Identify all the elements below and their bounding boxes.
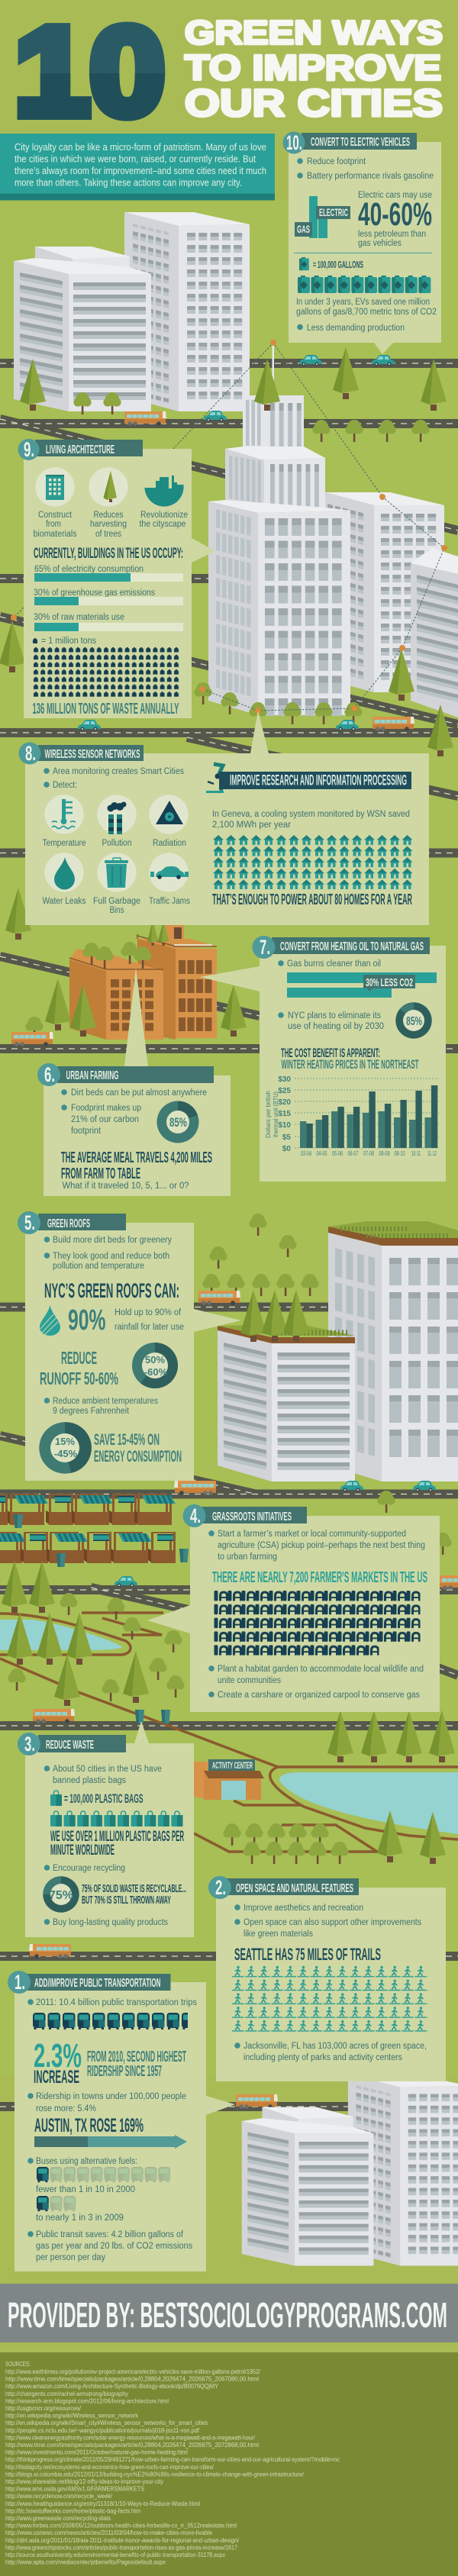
header 9: 9. [24, 438, 34, 461]
sources: http://www.amazon.com/Living-Architecture-Synthetic-Biology-ebook/dp/B0076QQjMY [5, 2383, 219, 2390]
bullet Jacksonville [234, 2042, 427, 2062]
bar chart: heating prices: $5 [282, 1133, 291, 1142]
bullet gas: Gas burns cleaner than oil [287, 959, 381, 969]
bullet alt fuels: Buses using alternative fuels: [36, 2157, 137, 2166]
sources: http://www.healthguidance.org/entry/11318/1/10-Ways-to-Reduce-Waste.html [5, 2500, 200, 2507]
central skyscraper [208, 345, 458, 717]
header 7 [252, 936, 430, 959]
donut 75%: 75% [49, 1889, 73, 1902]
icon: temperature [43, 795, 85, 848]
bullet ridership: rose more: 5.4% [36, 2104, 96, 2113]
market stalls [0, 1494, 189, 1723]
gallons pictogram [298, 257, 431, 293]
sources: http://dirt.asla.org/2011/01/18/aia-2011-institute-honor-awards-for-regional-and-urban-design/ [5, 2537, 240, 2544]
waste pictogram: = 1 million tons [41, 637, 96, 646]
bar chart: heating prices: 09-10 [394, 1150, 405, 1157]
panel 6: urban farming: THE AVERAGE MEAL TRAVELS 4,200 MILES [61, 1149, 212, 1166]
CO2 comparison bars [287, 972, 437, 998]
runoff stat: 50% [145, 1354, 165, 1365]
stat 40-60%: Electric cars may use [358, 191, 432, 200]
captions: harvesting [90, 520, 127, 529]
bullets: unite communities [218, 1676, 281, 1685]
bullet: banned plastic bags [53, 1776, 126, 1785]
bar chart: heating prices: 04-05 [316, 1150, 327, 1157]
panel 7: heating oil to natural gas [200, 936, 446, 1182]
donut 85% [157, 1101, 198, 1143]
footer: provided by band [0, 2284, 458, 2342]
NYC bullet: use of heating oil by 2030 [288, 1022, 384, 1031]
donut 75% [43, 1876, 186, 1913]
sources: http://research-arm.blogspot.com/2012/06/living-architecture.html [5, 2398, 169, 2404]
gas vs electric chart [295, 196, 350, 238]
big number 10: 10 [15, 2, 165, 141]
icon: garbage bin: Full Garbage [93, 897, 140, 906]
panel 5: green roofs: NYC’S GREEN ROOFS CAN: [44, 1279, 179, 1302]
icon: garbage bin: Bins [110, 906, 124, 915]
vehicles [11, 355, 458, 2109]
EV text: Less demanding production [307, 324, 405, 333]
bullets: like green materials [244, 1930, 313, 1939]
sources: http://www.greenchipstocks.com/articles/public-transportation-rises-as-gas-prices-increase/1617 [5, 2545, 237, 2551]
bullets [234, 1904, 421, 1939]
donut 75%: BUT 70% IS STILL THROWN AWAY [82, 1894, 171, 1907]
sources: http://usgbcncr.org/resources/ [5, 2405, 82, 2412]
gallons pictogram: = 100,000 GALLONS [313, 259, 363, 270]
header 8: WIRELESS SENSOR NETWORKS [44, 748, 140, 761]
sources: http://people.cs.nctu.edu.tw/~wangyc/publications/journals/j018-jss11-vsn.pdf [5, 2427, 200, 2434]
NYC bullet [278, 1011, 384, 1031]
plastic stat [50, 1829, 184, 1859]
bar chart: heating prices: 10-11 [411, 1150, 421, 1157]
sources: http://www.forbes.com/2008/05/12/outdoors-health-cities-forbeslife-cx_rr_0512realestate.html [5, 2522, 237, 2529]
bar chart: heating prices: Dollars per british [264, 1091, 272, 1138]
green-roof buildings [218, 1221, 458, 1481]
intro box: there’s always room for improvement–and some cities need it much [15, 165, 266, 176]
Geneva text: 2,100 MWh per year [212, 821, 291, 830]
stat 2.3% increase [34, 2037, 186, 2088]
captions: from [46, 520, 61, 529]
bullets: Dirt beds can be put almost anywhere [71, 1088, 207, 1098]
icon: tree [89, 467, 128, 507]
Austin stat with arrow: AUSTIN, TX ROSE 169% [34, 2115, 144, 2136]
houses pictogram [213, 835, 412, 889]
header 7: 7. [260, 936, 270, 959]
bullets: Create a carshare or organized carpool to conserve gas [218, 1691, 420, 1700]
stat 2.3% increase: INCREASE [34, 2067, 79, 2088]
bullets: Improve aesthetics and recreation [244, 1904, 363, 1913]
panel 1: public transportation: FROM 2010, SECOND HIGHEST [87, 2049, 186, 2065]
bullet [44, 1765, 162, 1785]
trees [0, 347, 455, 1864]
market pictogram [214, 1591, 420, 1656]
bullets [208, 1665, 424, 1700]
header 10: 10. [286, 131, 302, 154]
bullet alt fuels [27, 2157, 171, 2223]
bullets: Open space can also support other improvements [244, 1918, 421, 1927]
bullet transit saves: Public transit saves: 4.2 billion gallons of [36, 2230, 184, 2239]
panel 4: grassroots initiatives [147, 1504, 440, 1712]
gas vs electric chart: ELECTRIC [319, 206, 348, 218]
bullet alt fuels: to nearly 1 in 3 in 2009 [36, 2213, 124, 2223]
waste pictogram [32, 637, 180, 717]
header 1: 1. [15, 1971, 25, 1994]
sources: SOURCES: [5, 2361, 31, 2368]
panel 5: green roofs [18, 1211, 241, 1481]
bullet recycling: Encourage recycling [53, 1864, 125, 1873]
park paths and ponds [0, 1613, 458, 1852]
panel 2: open space [208, 1876, 446, 2081]
bullets [61, 1088, 207, 1136]
header 5 [18, 1211, 126, 1234]
bullet ridership: Ridership in towns under 100,000 people [36, 2092, 186, 2101]
icon: building [35, 467, 75, 507]
sources: http://en.wikipedia.org/wiki/Wireless_sensor_network [5, 2412, 139, 2420]
bullet transit saves: per person per day [36, 2253, 105, 2262]
header 3 [18, 1733, 126, 1755]
hikers pictogram [232, 1966, 428, 2033]
panel 9: living architecture: CURRENTLY, BUILDINGS IN THE US OCCUPY: [34, 546, 183, 562]
sources: http://www.time.com/time/specials/packages/article/0,28804,2026474_2026675_2067080,00.html [5, 2375, 259, 2383]
captions [34, 511, 188, 539]
header 3: 3. [24, 1733, 35, 1755]
panel 9: living architecture: 136 MILLION TONS OF WASTE ANNUALLY [32, 701, 179, 717]
panel 10: electric vehicles [282, 131, 441, 354]
energy stat [39, 1422, 182, 1474]
infographic canvas: WE USE OVER 1 MILLION PLASTIC BAGS PER [50, 1829, 184, 1845]
header 6 [37, 1063, 214, 1086]
title words: GREEN WAYS [185, 14, 443, 52]
bullets: Area monitoring creates Smart Cities [53, 767, 184, 776]
intro box: City loyalty can be like a micro-form of patriotism. Many of us love [15, 141, 266, 153]
stat 40-60%: less petroleum than [358, 230, 426, 239]
bar chart: heating prices: 05-06 [332, 1150, 343, 1157]
header 2: 2. [215, 1876, 226, 1899]
header 6: 6. [44, 1063, 55, 1086]
panel 9: living architecture [18, 438, 215, 718]
sources: http://source.southuniversity.edu/environmental-benefits-of-public-transportation-31178.aspx [5, 2552, 225, 2558]
rainfall stat: rainfall for later use [114, 1323, 184, 1332]
icon: traffic car [149, 853, 190, 906]
bullet temperature: Reduce ambient temperatures [53, 1397, 158, 1406]
icon: traffic car: Traffic Jams [149, 897, 190, 906]
bar chart: heating prices: $20 [278, 1098, 291, 1107]
bullets: Plant a habitat garden to accommodate local wildlife and [218, 1665, 424, 1674]
bullets: 21% of our carbon [71, 1115, 139, 1124]
bullet temperature [44, 1397, 158, 1416]
icon: pollution: Pollution [102, 839, 131, 848]
rainfall stat: Hold up to 90% of [114, 1308, 182, 1317]
sources [0, 2352, 458, 2576]
plastic stat: MINUTE WORLDWIDE [50, 1843, 114, 1859]
bullet transit saves: gas per year and 20 lbs. of CO2 emissions [36, 2242, 192, 2251]
skyline: top-left towers [14, 212, 250, 411]
header 4 [183, 1504, 307, 1527]
runoff stat: -60% [144, 1366, 168, 1378]
icon: garbage bin [93, 853, 140, 915]
Austin stat with arrow [34, 2115, 187, 2149]
infographic canvas: 75% OF SOLID WASTE IS RECYCLABLE... [82, 1882, 186, 1895]
sources: http://thinkprogress.org/climate/2012/05/29/491271/how-urban-farming-can-transform-our-cities-and-our-agricultural-system/?mobile=nc [5, 2456, 340, 2463]
bar chart: 30% of raw materials use [34, 613, 124, 622]
header 4: GRASSROOTS INITIATIVES [212, 1510, 292, 1523]
bar chart: heating prices: 11-12 [427, 1150, 437, 1157]
bullets: Foodprint makes up [71, 1104, 141, 1113]
bullet farmer's market [208, 1530, 425, 1562]
bullets: footprint [71, 1127, 102, 1136]
stat 40-60%: gas vehicles [358, 239, 402, 248]
header 6: URBAN FARMING [66, 1069, 119, 1082]
icon: cityscape [144, 467, 184, 507]
bullet farmer's market: Start a farmer’s market or local community-supported [218, 1530, 406, 1539]
sources: http://changents.com/rachel-armstrong/biography [5, 2391, 128, 2397]
stat 40-60% [358, 191, 432, 248]
bullet Jacksonville: including plenty of parks and activity centers [244, 2053, 402, 2062]
bullets [297, 157, 434, 181]
energy stat: -45% [54, 1448, 78, 1459]
captions: Revolutionize [140, 511, 188, 520]
bullet alt fuels: fewer than 1 in 10 in 2000 [36, 2185, 135, 2194]
runoff stat [40, 1343, 178, 1388]
sources: http://www.apta.com/mediacenter/ptbenefits/Pages/default.aspx [5, 2558, 166, 2566]
bullets [44, 1236, 172, 1271]
header 9 [18, 438, 143, 461]
captions: of trees [95, 530, 121, 539]
NYC bullet: NYC plans to eliminate its [288, 1011, 381, 1020]
bottom-right towers [242, 2074, 458, 2266]
bags pictogram: = 100,000 PLASTIC BAGS [64, 1791, 144, 1806]
sources: http://en.wikipedia.org/wiki/Smart_city#Wireless_sensor_networks_for_smart_cities [5, 2420, 208, 2426]
icon: pollution [97, 795, 137, 848]
gas vs electric chart: GAS [297, 223, 310, 235]
Geneva text: In Geneva, a cooling system monitored by WSN saved [212, 810, 410, 819]
icon: radiation: Radiation [153, 839, 186, 848]
icon: microscope [206, 764, 224, 793]
icon: radiation [149, 795, 189, 848]
bullet farmer's market: to urban farming [218, 1552, 277, 1562]
header 5: GREEN ROOFS [47, 1217, 90, 1230]
energy stat: SAVE 15-45% ON [94, 1431, 160, 1449]
sources: http://www.ams.usda.gov/AMSv1.0/FARMERSMARKETS [5, 2485, 144, 2493]
sources: http://www.cleanenergyauthority.com/solar-energy-resources/what-is-a-megawatt-and-a-megawatt-hour/ [5, 2435, 256, 2441]
energy stat: 15% [55, 1436, 75, 1447]
title words [185, 14, 443, 124]
EV text: In under 3 years, EVs saved one million [296, 298, 430, 307]
bar chart: 30% of greenhouse gas emissions [34, 588, 155, 598]
bar chart: heating prices: 06-07 [348, 1150, 359, 1157]
runoff stat: REDUCE [61, 1348, 97, 1368]
panel 5: green roofs: ENERGY CONSUMPTION [94, 1448, 182, 1465]
chart heading [281, 1046, 419, 1072]
meal stat: What if it traveled 10, 5, 1... or 0? [63, 1182, 189, 1191]
bullet temperature: 9 degrees Fahrenheit [53, 1407, 130, 1416]
header 3: REDUCE WASTE [46, 1739, 94, 1752]
rainfall stat: 90% [68, 1304, 105, 1336]
icon: temperature: Temperature [43, 839, 85, 848]
captions: Construct [38, 511, 73, 520]
bar chart: 65% of electricity consumption [34, 565, 144, 574]
bar chart [34, 565, 183, 631]
panel 1: public transportation [8, 1971, 235, 2271]
title [17, 19, 443, 121]
bar chart: heating prices: 07-08 [363, 1150, 374, 1157]
bullet transit saves [27, 2230, 192, 2262]
bar chart: heating prices: $25 [278, 1087, 291, 1095]
header 5: 5. [24, 1211, 35, 1234]
sources: http://www.time.com/time/specials/packages/article/0,28804,2026474_2026675_2072868,00.html [5, 2442, 259, 2449]
header 9: LIVING ARCHITECTURE [46, 443, 114, 456]
donut 85%: 85% [406, 1015, 422, 1028]
title words: OUR CITIES [185, 82, 443, 124]
bullets: Battery performance rivals gasoline [307, 172, 434, 181]
bar chart: heating prices [264, 1075, 439, 1157]
bullet farmer's market: agriculture (CSA) pickup point–perhaps the next best thing [218, 1541, 425, 1550]
intro box: the cities in which we were born, raised, or currently reside. But [15, 153, 256, 165]
EV text: gallons of gas/8,700 metric tons of CO2 [296, 308, 437, 317]
stat 2.3% increase: RIDERSHIP SINCE 1957 [87, 2063, 162, 2080]
bar chart: heating prices: 08-09 [379, 1150, 390, 1157]
bar chart: heating prices: $15 [278, 1110, 291, 1118]
bullet trips: 2011: 10.4 billion public transportation trips [36, 1998, 197, 2007]
bullets: pollution and temperature [53, 1262, 144, 1271]
captions: biomaterials [34, 530, 77, 539]
intro box: more than others. Taking these actions can improve any city. [15, 177, 242, 188]
bullets: Reduce footprint [307, 157, 366, 166]
bar chart: heating prices: $10 [278, 1121, 291, 1130]
bags pictogram [50, 1791, 182, 1826]
bullet ridership [27, 2092, 186, 2113]
panel 3: reduce waste [18, 1721, 194, 1937]
donut 85%: 85% [169, 1115, 187, 1130]
sources: http://www.earthtimes.org/pollution/ev-project-americanelectric-vehicles-save-million-gallons-petrol/1952/ [5, 2368, 261, 2375]
intro box [0, 134, 275, 200]
icon: water drop: Water Leaks [43, 897, 86, 906]
panel 8: wireless sensor networks [18, 711, 429, 925]
sources: http://tlc.howstuffworks.com/home/plastic-bag-facts.htm [5, 2508, 140, 2514]
panel 6: urban farming [37, 968, 231, 1196]
bullet products: Buy long-lasting quality products [53, 1918, 168, 1927]
header 10 [282, 131, 417, 154]
big number 10: 10 [15, 2, 165, 141]
Geneva text [212, 810, 410, 830]
sources: http://www.recyclenow.com/recycle_week/ [5, 2493, 113, 2500]
header 8 [18, 742, 144, 765]
icon: water drop [43, 853, 86, 906]
bullets: Build more dirt beds for greenery [53, 1236, 172, 1245]
header 1: ADD/IMPROVE PUBLIC TRANSPORTATION [34, 1977, 160, 1990]
bus pictogram [32, 2013, 188, 2030]
bar chart: heating prices: $0 [282, 1145, 291, 1153]
sensor wire network [11, 340, 447, 714]
bullets [44, 767, 184, 790]
captions: Reduces [93, 511, 124, 520]
bar chart: heating prices: $30 [278, 1075, 291, 1084]
big number 10 [17, 21, 165, 121]
roads [0, 363, 458, 2107]
orange rooftop-farm building [69, 920, 217, 1040]
rainfall stat [40, 1304, 184, 1336]
sources: http://www.shareable.net/blog/12-nifty-ideas-to-improve-your-city [5, 2478, 163, 2485]
bar chart: heating prices: 03-04 [301, 1150, 311, 1157]
bullet Jacksonville: Jacksonville, FL has 103,000 acres of green space, [244, 2042, 427, 2051]
sources: http://www.greenwaste.com/recycling-stats [5, 2515, 111, 2522]
activity center: ACTIVITY CENTER [212, 1760, 253, 1771]
stat 2.3% increase: 2.3% [34, 2037, 82, 2075]
meal stat [61, 1149, 212, 1191]
sources: http://blogs.ei.columbia.edu/2012/01/13/building-nyc%E2%80%99s-resilience-to-climate-change-with-green-infrastructure/ [5, 2471, 305, 2478]
sources: http://www.investmentu.com/2011/October/natural-gas-home-heating.html [5, 2449, 188, 2456]
activity center [194, 1759, 264, 1800]
header 8: 8. [25, 742, 36, 765]
header 4: 4. [190, 1504, 201, 1527]
header 2 [208, 1876, 359, 1899]
sources: http://thisbigcity.net/ecosystems-and-economics-how-green-roofs-can-improve-our-cities/ [5, 2464, 214, 2471]
donut 85% [395, 1002, 432, 1039]
captions: the cityscape [139, 520, 186, 529]
bullets: They look good and reduce both [53, 1252, 169, 1261]
EV text [296, 298, 437, 333]
header 1 [8, 1971, 171, 1994]
bar chart: heating prices: thermal unit (BTU) [272, 1091, 279, 1137]
title words: TO IMPROVE [185, 47, 441, 87]
CO2 comparison bars: 30% LESS CO2 [366, 976, 413, 989]
sources: http://www.usnews.com/news/articles/2011/03/04/how-to-make-cities-more-livable [5, 2529, 213, 2536]
bullet: About 50 cities in the US have [53, 1765, 162, 1774]
meal stat: FROM FARM TO TABLE [61, 1165, 140, 1182]
runoff stat: RUNOFF 50-60% [40, 1369, 118, 1388]
bullets: Detect: [53, 781, 77, 790]
